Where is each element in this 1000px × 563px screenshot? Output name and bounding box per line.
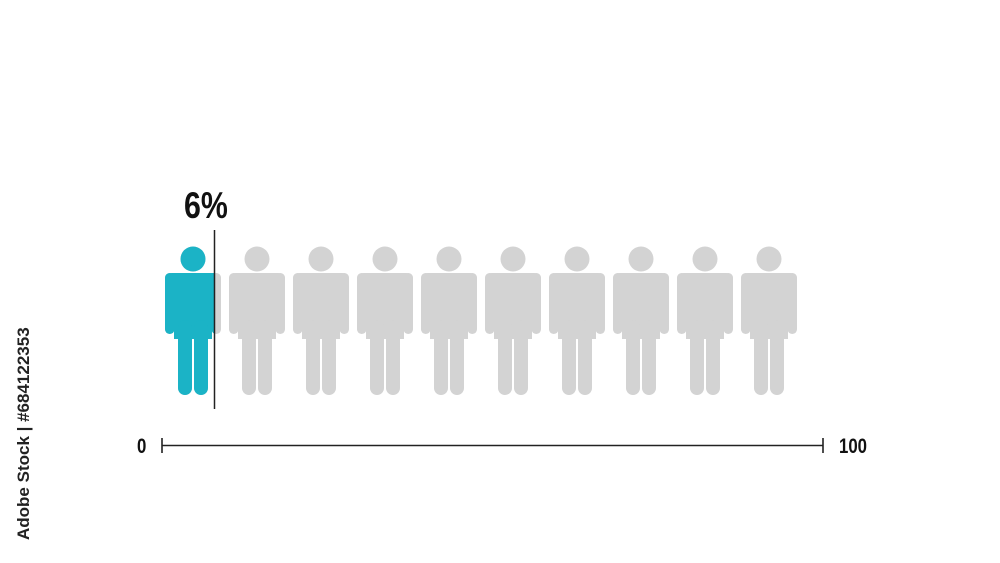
axis label 100: 100: [839, 435, 867, 459]
highlighted person (6%): [165, 246, 214, 395]
axis label 0: 0: [137, 435, 146, 459]
marker line: [214, 230, 216, 409]
percentage label: 6%: [184, 185, 228, 227]
watermark id text: Adobe Stock | #684122353: [14, 327, 33, 540]
axis: [162, 438, 823, 453]
infographic: [17, 192, 866, 540]
people icons row: [165, 246, 797, 395]
